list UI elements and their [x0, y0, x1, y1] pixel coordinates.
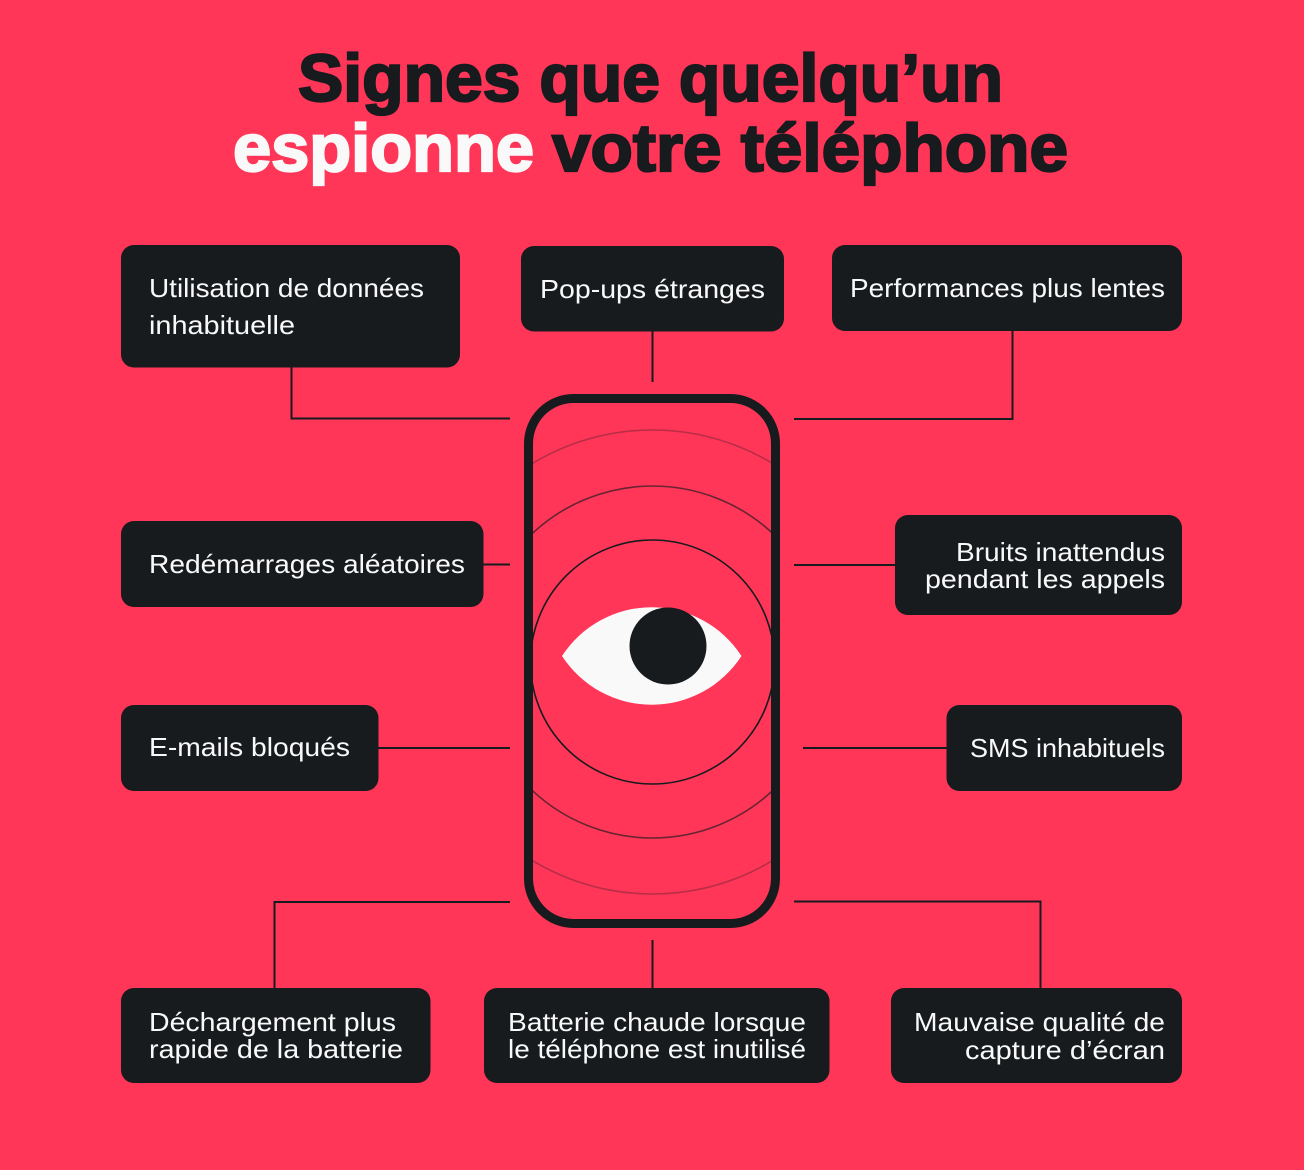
box: SMS: SMS inhabituels	[970, 733, 1165, 763]
connector: performance	[794, 331, 1012, 419]
box: battery drain	[121, 988, 430, 1083]
connector: data usage	[292, 367, 510, 418]
eye	[562, 607, 742, 705]
title: espionne	[233, 111, 534, 186]
connector: SMS	[803, 747, 947, 749]
title: Signes que quelqu’un	[298, 41, 1003, 116]
connector: screenshot quality	[794, 902, 1040, 989]
box: hot battery: le téléphone est inutilisé	[508, 1034, 806, 1064]
connector: battery drain	[274, 902, 510, 989]
box: battery drain: rapide de la batterie	[149, 1034, 403, 1064]
connector: noises	[794, 564, 896, 566]
box: data usage: Utilisation de données	[149, 273, 424, 303]
box: e-mails	[121, 705, 378, 791]
connector: e-mails	[378, 747, 510, 749]
title	[233, 41, 1068, 186]
box: SMS	[946, 705, 1182, 791]
box: data usage	[121, 245, 460, 368]
phone frame	[528, 398, 776, 924]
box: data usage: inhabituelle	[149, 310, 295, 340]
box: noises	[895, 515, 1182, 615]
box: pop-ups	[521, 246, 784, 332]
box: restarts: Redémarrages aléatoires	[149, 549, 465, 579]
connector: restarts	[483, 564, 510, 566]
title: votre téléphone	[552, 111, 1068, 186]
connector: pop-ups	[652, 331, 654, 382]
box: noises: pendant les appels	[925, 564, 1165, 594]
box: noises: Bruits inattendus	[956, 537, 1165, 567]
connector: hot battery	[652, 940, 654, 989]
box: screenshot quality: capture d’écran	[965, 1035, 1165, 1065]
signal rings	[533, 429, 771, 895]
box: performance	[832, 245, 1182, 331]
box: performance: Performances plus lentes	[850, 273, 1165, 303]
box: hot battery	[484, 988, 830, 1083]
box: hot battery: Batterie chaude lorsque	[508, 1007, 806, 1037]
phone with signal rings and eye	[524, 394, 780, 928]
box: pop-ups: Pop-ups étranges	[540, 274, 765, 304]
box: screenshot quality: Mauvaise qualité de	[914, 1007, 1165, 1037]
box: battery drain: Déchargement plus	[149, 1007, 396, 1037]
box: e-mails: E-mails bloqués	[149, 732, 350, 762]
box: restarts	[121, 521, 484, 607]
box: screenshot quality	[891, 988, 1182, 1083]
